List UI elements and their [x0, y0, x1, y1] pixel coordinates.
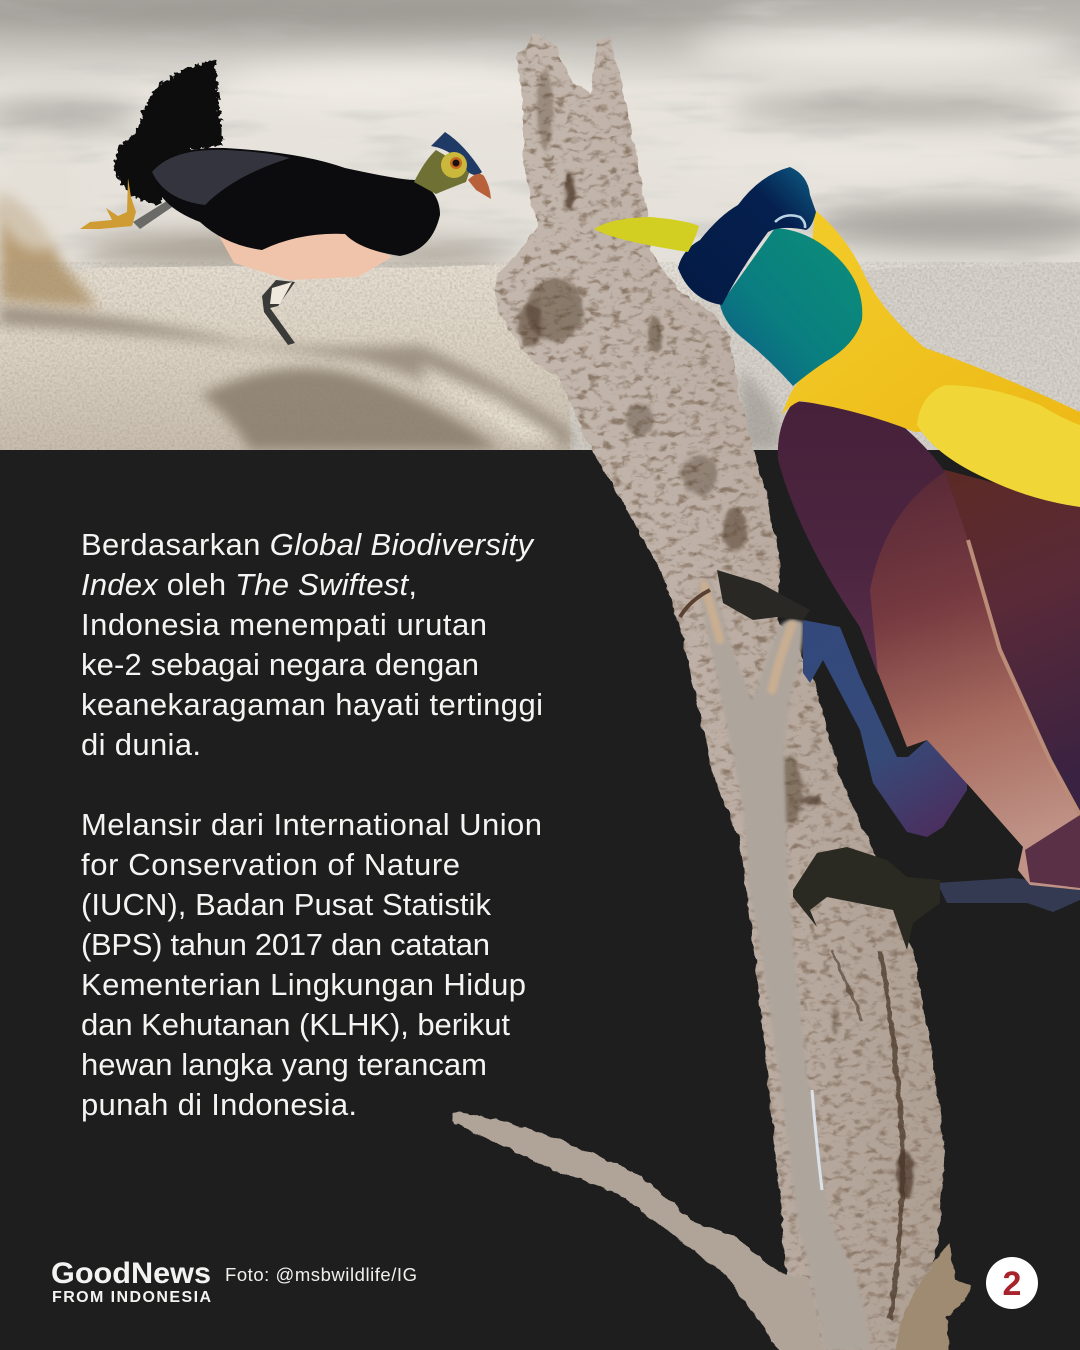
lower leg — [937, 878, 1080, 912]
yellow neck — [782, 210, 1080, 440]
footer logo: GoodNews from Indonesia: GoodNews — [51, 1257, 211, 1290]
salmon plume — [830, 470, 1080, 890]
driftwood trunk — [490, 30, 960, 1350]
photo credit: Foto: @msbwildlife/IG — [225, 1264, 417, 1285]
text block: intro paragraphs: for Conservation of Nature — [81, 847, 460, 882]
yellow wing — [917, 385, 1080, 507]
standing leg — [262, 280, 295, 345]
bird of paradise — [594, 167, 1080, 950]
teal throat — [720, 228, 862, 386]
beak — [594, 217, 699, 252]
lower claw — [793, 847, 940, 950]
navy head — [678, 167, 816, 305]
belly — [218, 232, 392, 280]
text block: intro paragraphs: di dunia. — [81, 727, 201, 762]
text block: intro paragraphs: Indonesia menempati urutan — [81, 607, 487, 642]
lower left branch — [452, 1112, 830, 1350]
tail feathers — [114, 60, 223, 205]
text block: intro paragraphs: ke-2 sebagai negara dengan — [81, 647, 479, 682]
beak — [468, 174, 491, 199]
text block: intro paragraphs: Kementerian Lingkungan Hidup — [81, 967, 526, 1002]
upper leg — [803, 620, 967, 837]
footer logo: GoodNews from Indonesia — [51, 1257, 211, 1306]
thin front twig — [698, 579, 870, 1350]
purple breast — [778, 401, 945, 675]
page number badge: 2 — [1003, 1265, 1021, 1303]
text block: intro paragraphs: hewan langka yang terancam — [81, 1047, 487, 1082]
eye ring — [775, 215, 805, 228]
page number badge — [986, 1257, 1038, 1309]
text block: intro paragraphs: (IUCN), Badan Pusat Statistik — [81, 887, 492, 922]
photo: maleo bird — [80, 60, 491, 345]
body — [152, 148, 440, 256]
text block: intro paragraphs: Index oleh The Swiftest, — [81, 567, 417, 602]
photo: sandy beach — [0, 0, 1080, 450]
text block: intro paragraphs: (BPS) tahun 2017 dan catatan — [81, 927, 490, 962]
head and neck — [414, 150, 470, 194]
footer logo: GoodNews from Indonesia: FROM INDONESIA — [52, 1289, 211, 1306]
text block: intro paragraphs: punah di Indonesia. — [81, 1087, 357, 1122]
lifted leg and foot — [80, 178, 136, 229]
small branch stub — [885, 1243, 972, 1350]
text block: intro paragraphs: Melansir dari International Union — [81, 807, 542, 842]
sand foreground — [0, 262, 570, 450]
text block: intro paragraphs: keanekaragaman hayati tertinggi — [81, 687, 543, 722]
text block: intro paragraphs: Berdasarkan Global Biodiversity — [81, 527, 536, 562]
sand spray — [0, 190, 98, 307]
upper claw — [717, 570, 810, 620]
text block: intro paragraphs: dan Kehutanan (KLHK), berikut — [81, 1007, 510, 1042]
dark right plume — [945, 470, 1080, 820]
text block: intro paragraphs — [81, 527, 543, 1122]
